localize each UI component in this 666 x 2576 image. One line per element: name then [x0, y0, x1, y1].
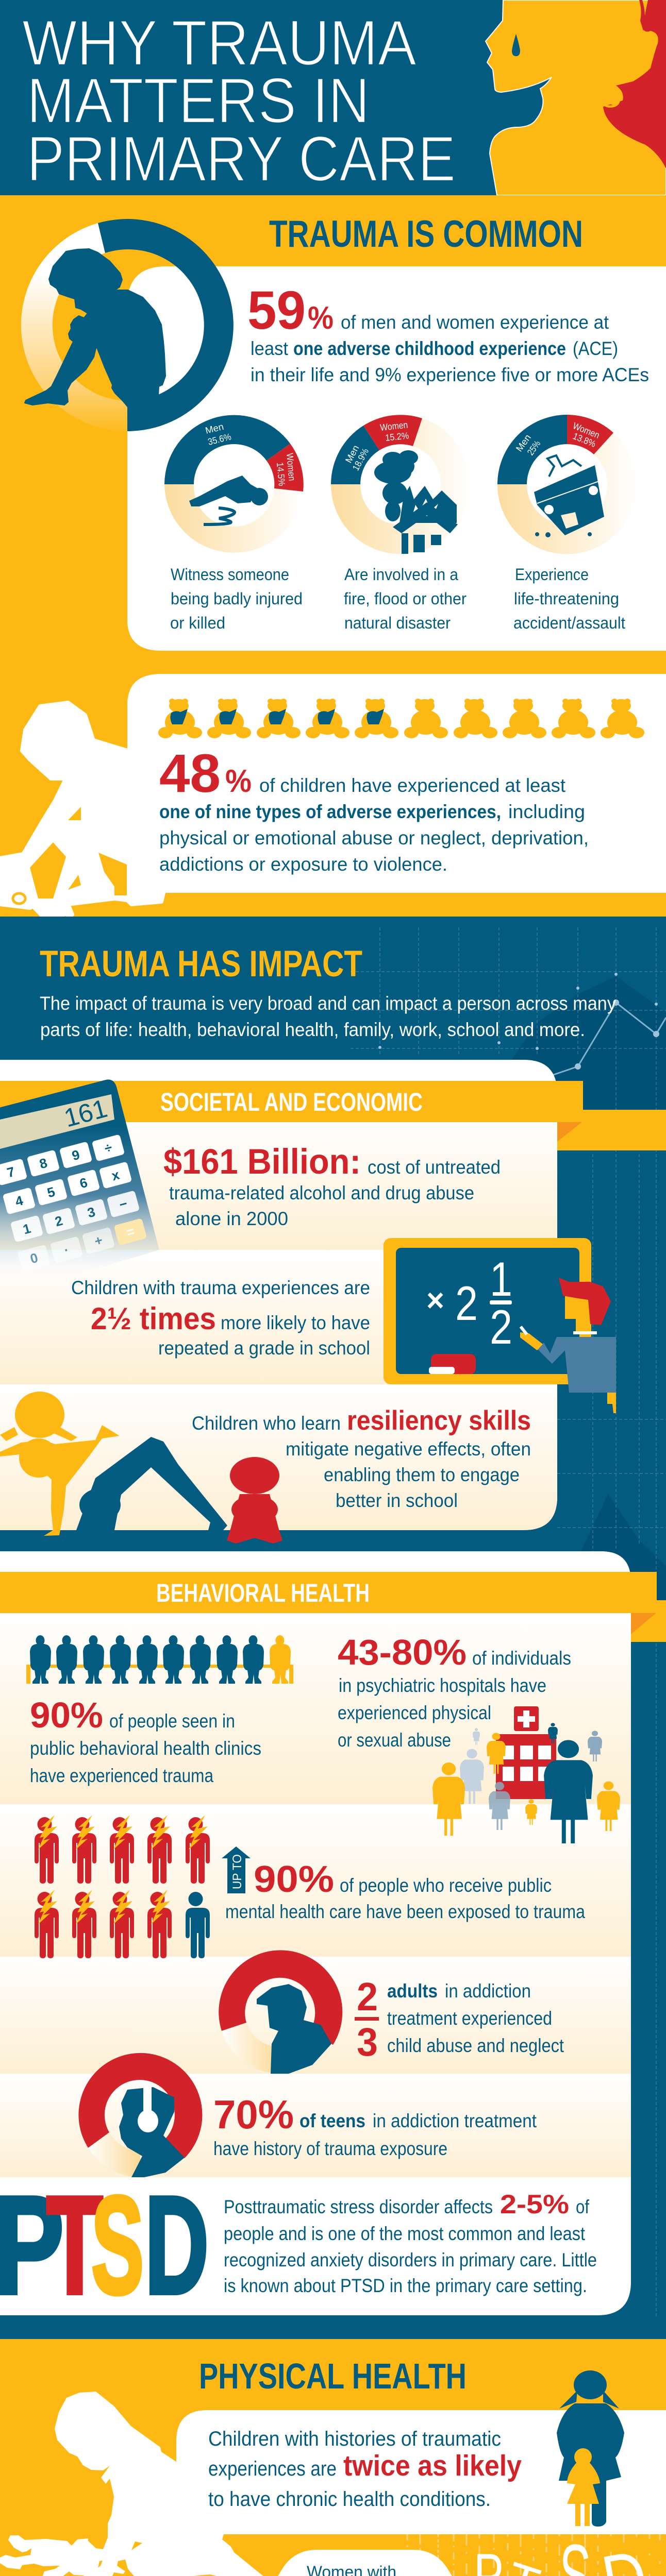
panel: 48 percent of children: [0, 674, 666, 921]
stat: 90 percent clinics: public behavioral health clinics: [30, 1738, 261, 1759]
stat: up to 90 percent: 90%: [254, 1859, 334, 1900]
icon: children doing yoga: [0, 1392, 282, 1544]
stat: 59 percent: least: [251, 338, 289, 359]
stat: 70 percent: have history of trauma exposure: [213, 2138, 447, 2159]
stat: two and a half times: more likely to have: [221, 1312, 370, 1333]
background: distressed texture and puppet: [407, 2527, 660, 2576]
stat: 48 percent: of children have experienced at least: [259, 775, 566, 796]
text: witness someone: Witness someone: [171, 565, 289, 584]
stat: 48 percent: addictions or exposure to violence.: [159, 854, 447, 875]
icon: crawling child with toy: [0, 703, 165, 921]
text: witness someone: or killed: [170, 614, 225, 632]
chart: disaster donut: 15.2%: [385, 430, 409, 443]
text: experience accident: Experience: [515, 565, 589, 584]
icon: calculator: 5: [45, 1184, 57, 1200]
stat: 70 percent: of teens: [299, 2110, 365, 2131]
title: WHY TRAUMA: [22, 8, 417, 79]
red child sitting: [227, 1457, 282, 1544]
banner ribbon: [0, 1081, 666, 1150]
icon: teacher: [520, 1278, 616, 1413]
stat: two thirds: adults: [387, 1980, 438, 2002]
chart: witness donut: [164, 415, 304, 553]
chart: accident donut: Women: [572, 420, 601, 440]
callout: twice as likely: twice as likely: [343, 2449, 522, 2482]
arrow: up to: UP TO: [230, 1854, 244, 1889]
icon: calculator: x: [110, 1167, 121, 1183]
text: PTSD description: Posttraumatic stress disorder affects: [224, 2196, 493, 2217]
stat: two thirds: 2: [357, 1975, 378, 2019]
icon grid: ten people with lightning: [35, 1815, 210, 1958]
text: resiliency: better in school: [336, 1490, 458, 1511]
stat: two and a half times: repeated a grade in school: [158, 1337, 370, 1359]
stat: 59 percent: 59: [247, 280, 306, 341]
stat: 90 percent clinics: [30, 1695, 261, 1786]
stat: two and a half times: Children with trauma experiences are: [71, 1277, 370, 1298]
stat: 43-80 percent: [338, 1632, 571, 1751]
stat: 48 percent: including: [508, 801, 585, 822]
blue child bending: [76, 1437, 227, 1530]
icon: calculator: ÷: [103, 1140, 114, 1156]
text: resiliency: enabling them to engage: [324, 1464, 520, 1485]
chart: witness donut: 35.6%: [207, 431, 232, 447]
stat: 90 percent clinics: of people seen in: [109, 1710, 235, 1732]
icon: calculator: 7: [5, 1164, 16, 1180]
text: PTSD description: is known about PTSD in the primary care setting.: [224, 2275, 587, 2296]
icon: calculator: 6: [78, 1175, 89, 1191]
text: PTSD description: 2-5%: [500, 2190, 569, 2219]
text: resiliency: resiliency skills: [347, 1405, 531, 1436]
text: PTSD description: of: [576, 2196, 590, 2217]
text: resiliency: [192, 1405, 531, 1511]
icon: calculator: 8: [38, 1155, 49, 1172]
icon: woman face silhouette with tear: [486, 0, 666, 195]
heading: trauma is common: TRAUMA IS COMMON: [269, 213, 583, 255]
callout: twice as likely: [176, 2410, 666, 2534]
heading: societal and economic: SOCIETAL AND ECONOMIC: [160, 1088, 423, 1116]
stat: 70 percent: in addiction treatment: [373, 2110, 537, 2131]
icon: calculator: 1: [21, 1221, 32, 1237]
icon: chalkboard with fraction: 1: [490, 1252, 512, 1306]
stat: 43-80 percent: 43-80%: [338, 1632, 467, 1672]
icon: mother and daughter: [557, 2370, 624, 2527]
text: PTSD description: people and is one of the most common and least: [224, 2223, 586, 2244]
icon: teen donut with headphones: [78, 2053, 202, 2177]
text: experience accident: accident/assault: [513, 614, 625, 632]
stat: 59 percent: one adverse childhood experience: [293, 338, 566, 359]
stat: two thirds: in addiction: [445, 1980, 531, 2002]
graphic: PTSD letters: [0, 2168, 209, 2323]
chart: disaster donut: 18.9%: [351, 447, 371, 472]
stat: 43-80 percent: or sexual abuse: [338, 1730, 451, 1751]
stat: two thirds: child abuse and neglect: [387, 2035, 564, 2056]
graphic: PTSD letters: T: [46, 2168, 103, 2323]
stat: 48 percent: 48: [159, 743, 221, 804]
stat: 48 percent: one of nine types of adverse experiences,: [159, 801, 501, 822]
panel: physical health: [0, 2339, 666, 2576]
stat: two thirds: [355, 1975, 564, 2064]
stat: 59 percent: in their life and 9% experience five or more ACEs: [251, 364, 649, 385]
text: are involved: fire, flood or other: [344, 589, 467, 608]
icon: hospital and people: [432, 1706, 620, 1843]
stat: 70 percent: [213, 2092, 537, 2159]
panel: diabetes hexagon: [233, 2550, 497, 2576]
chart: witness donut: Men: [204, 421, 225, 436]
icon: calculator: [0, 1079, 159, 1288]
icon: calculator: 9: [70, 1147, 81, 1163]
stat: 70 percent: 70%: [213, 2092, 294, 2137]
stat: 59 percent: [247, 280, 649, 385]
heading: trauma has impact: TRAUMA HAS IMPACT: [40, 944, 362, 985]
puppet letters P T S D: [474, 2527, 654, 2576]
stat: 161 billion: $161 Billion:: [163, 1142, 361, 1181]
icon: calculator: 161: [61, 1094, 110, 1133]
stat: up to 90 percent: [222, 1846, 585, 1922]
chart: witness donut: Women: [285, 453, 297, 481]
stat: two and a half times: 2½ times: [91, 1301, 216, 1336]
panel: behavioral health: [0, 1551, 666, 2323]
chart: witness donut: 14.5%: [275, 462, 287, 486]
graphic: PTSD letters: S: [91, 2168, 144, 2323]
icon: chalkboard with fraction: 2: [490, 1300, 512, 1354]
chart: decorative background line graph: [351, 927, 666, 2318]
icon: calculator: 2: [53, 1213, 64, 1229]
icon: calculator: +: [93, 1232, 104, 1249]
icon row: ten teddy bears: [158, 699, 644, 738]
icon: calculator: 4: [13, 1193, 25, 1209]
stat: 59 percent: of men and women experience at: [341, 312, 609, 333]
text: PTSD description: recognized anxiety disorders in primary care. Little: [224, 2249, 597, 2270]
text: impact intro: parts of life: health, behavioral health, family, work, school and more.: [40, 1019, 585, 1040]
stat: 48 percent: physical or emotional abuse or neglect, deprivation,: [159, 827, 589, 849]
icon: overturned car: [534, 455, 604, 537]
stat: 161 billion: [163, 1142, 501, 1229]
title: MATTERS IN: [27, 65, 370, 137]
stat: up to 90 percent: mental health care have been exposed to trauma: [225, 1901, 585, 1922]
text: PTSD description: [224, 2190, 597, 2296]
text: experience accident: [513, 565, 625, 632]
icon: calculator: =: [125, 1224, 136, 1240]
text: witness someone: [170, 565, 303, 632]
icon: chalkboard with fraction: ×: [426, 1283, 444, 1318]
text: are involved: Are involved in a: [344, 565, 458, 584]
stat: 43-80 percent: of individuals: [472, 1648, 571, 1669]
chart: accident donut: [497, 415, 637, 554]
text: experience accident: life-threatening: [514, 589, 619, 608]
yellow child kicking: [0, 1392, 120, 1536]
stat: 59 percent: %: [308, 300, 334, 336]
icon: injured person: [189, 476, 268, 524]
chart: disaster donut: [331, 415, 470, 554]
panel: societal and economic: [0, 1060, 666, 1544]
text: resiliency: Children who learn: [192, 1413, 341, 1434]
stat: 48 percent: [159, 743, 589, 875]
icon: smoke and burning house: [374, 450, 458, 554]
stat: up to 90 percent: of people who receive public: [340, 1875, 552, 1896]
panel: trauma has impact: [0, 917, 666, 2339]
arrow: up to: [222, 1846, 251, 1893]
heading: behavioral health: BEHAVIORAL HEALTH: [156, 1579, 370, 1607]
icon: kneeling child with teddy: [0, 2392, 264, 2576]
title: [22, 8, 456, 195]
icon: calculator: ·: [62, 1242, 71, 1258]
icon row: seated people on bench: [26, 1635, 293, 1684]
stat: 161 billion: alone in 2000: [175, 1208, 288, 1229]
banner ribbon: [0, 1572, 666, 1642]
graphic: PTSD letters: D: [145, 2168, 209, 2323]
title: PRIMARY CARE: [27, 124, 456, 195]
text: are involved: natural disaster: [344, 614, 451, 632]
stat: 43-80 percent: experienced physical: [338, 1702, 491, 1723]
callout: twice as likely: Children with histories of traumatic: [208, 2428, 501, 2450]
heading: physical health: PHYSICAL HEALTH: [199, 2356, 467, 2396]
icon: calculator: 0: [28, 1250, 40, 1266]
callout: twice as likely: experiences are: [208, 2458, 337, 2480]
icon: calculator: 3: [86, 1204, 97, 1221]
chart: accident donut: 13.8%: [572, 431, 597, 449]
chart: accident donut: 25%: [525, 438, 542, 457]
callout: twice as likely: to have chronic health conditions.: [208, 2488, 491, 2511]
chart: accident donut: Men: [514, 432, 533, 453]
text: resiliency: mitigate negative effects, often: [286, 1438, 531, 1460]
icon: chalkboard with fraction: 2: [455, 1276, 478, 1330]
icon: two thirds donut with man: [219, 1950, 342, 2074]
icon: calculator: −: [118, 1196, 129, 1212]
stat: 161 billion: cost of untreated: [368, 1157, 501, 1178]
stat: 48 percent: %: [225, 764, 252, 799]
stat: two thirds: 3: [357, 2020, 378, 2064]
stat: two thirds: treatment experienced: [387, 2008, 552, 2029]
text: impact intro: [40, 993, 616, 1040]
stat: 90 percent clinics: have experienced trauma: [30, 1765, 213, 1786]
chart: disaster donut: Women: [379, 419, 408, 433]
stat: 59 percent: (ACE): [573, 338, 618, 359]
icon: ring with seated girl: [21, 219, 234, 431]
header banner: [0, 0, 666, 195]
stat: 43-80 percent: in psychiatric hospitals have: [339, 1675, 546, 1696]
icon: chalkboard with fraction: [384, 1238, 591, 1384]
text: are involved: [344, 565, 467, 632]
chart: disaster donut: Men: [343, 444, 361, 465]
text: impact intro: The impact of trauma is very broad and can impact a person across many: [40, 993, 616, 1014]
stat: two and a half times: [71, 1277, 370, 1359]
text: witness someone: being badly injured: [171, 589, 303, 608]
stat: 90 percent clinics: 90%: [30, 1695, 103, 1735]
stat: 161 billion: trauma-related alcohol and drug abuse: [169, 1182, 474, 1204]
